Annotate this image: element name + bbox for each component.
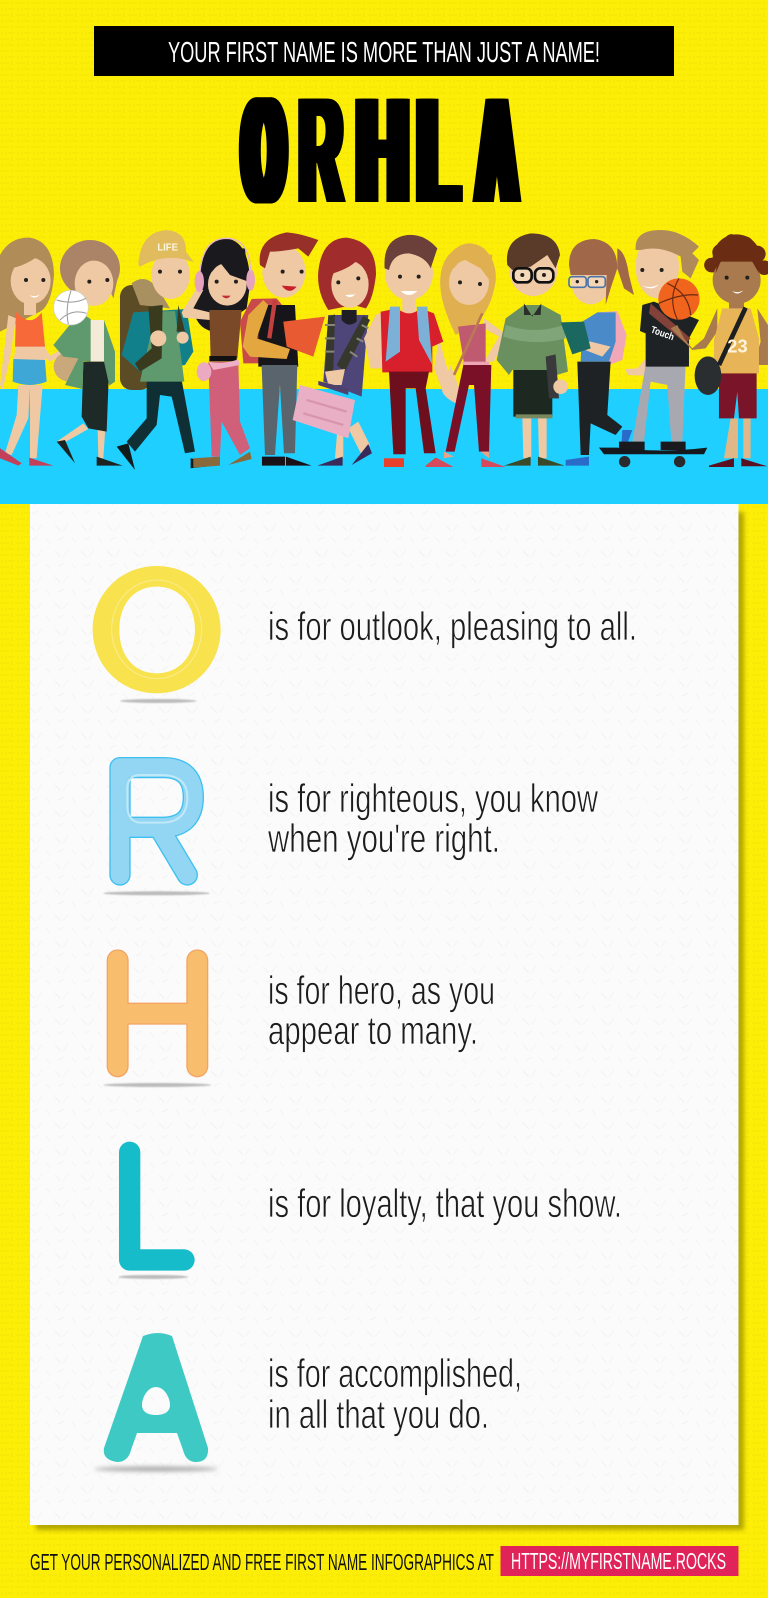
title: ORHLA: O	[244, 66, 284, 234]
figure: blonde girl	[426, 243, 507, 467]
figure: girl with ponytail and tablet	[561, 239, 634, 466]
icon: teal gel letter A	[94, 1333, 218, 1472]
figure: girl with headphones	[182, 238, 255, 468]
figure: hiker with cap and backpack: LIFE	[157, 242, 178, 253]
text: A lines	[268, 1352, 522, 1437]
icon: yellow gel letter O	[93, 566, 221, 703]
letter R row	[103, 768, 598, 895]
card shadow	[36, 512, 744, 1530]
title: ORHLA: L	[418, 66, 458, 234]
title: ORHLA: H	[357, 66, 408, 234]
figure: boy in red tee	[364, 235, 453, 467]
figure: skater with basketball: Touch	[649, 325, 675, 343]
letter O row	[93, 566, 637, 703]
icon: orange gel letter H	[103, 960, 211, 1087]
text: O line: is for outlook, pleasing to all.	[268, 605, 637, 649]
blue floor band	[0, 389, 768, 504]
figure: girl in orange top	[0, 238, 82, 466]
text: A lines: in all that you do.	[268, 1393, 489, 1437]
illustration: group of twelve students, right half	[364, 230, 768, 467]
title: ORHLA	[238, 66, 522, 234]
text: L line: is for loyalty, that you show.	[268, 1182, 622, 1226]
text: H lines: is for hero, as you	[268, 969, 495, 1013]
figure: boy with glasses	[497, 233, 568, 466]
header banner	[94, 26, 674, 76]
letter L row	[118, 1152, 622, 1279]
panel: white acrostic card	[30, 504, 738, 1525]
figure: skater with basketball	[599, 230, 707, 467]
text: R lines: when you're right.	[267, 817, 500, 861]
figure: girl with red hair and pink bag	[293, 238, 376, 466]
figure: curly-haired boy in jersey: 23	[727, 335, 748, 356]
illustration: group of twelve students, left half	[0, 230, 376, 470]
letter H row	[103, 960, 495, 1087]
text: R lines: is for righteous, you know	[268, 777, 598, 821]
figure: guy with red book	[240, 232, 325, 466]
text: A lines: is for accomplished,	[268, 1352, 522, 1396]
text: H lines: appear to many.	[268, 1009, 478, 1053]
figure: girl with volleyball	[53, 240, 123, 466]
icon: blue gel letter R	[103, 768, 210, 895]
icon: teal gel letter L	[118, 1152, 188, 1279]
title: ORHLA: A	[478, 66, 516, 234]
text: R lines	[267, 777, 598, 861]
title: ORHLA: R	[298, 66, 342, 234]
figure: curly-haired boy in jersey	[671, 234, 768, 467]
text: H lines	[268, 969, 495, 1053]
letter A row	[94, 1333, 522, 1472]
figure: hiker with cap and backpack	[117, 230, 220, 470]
